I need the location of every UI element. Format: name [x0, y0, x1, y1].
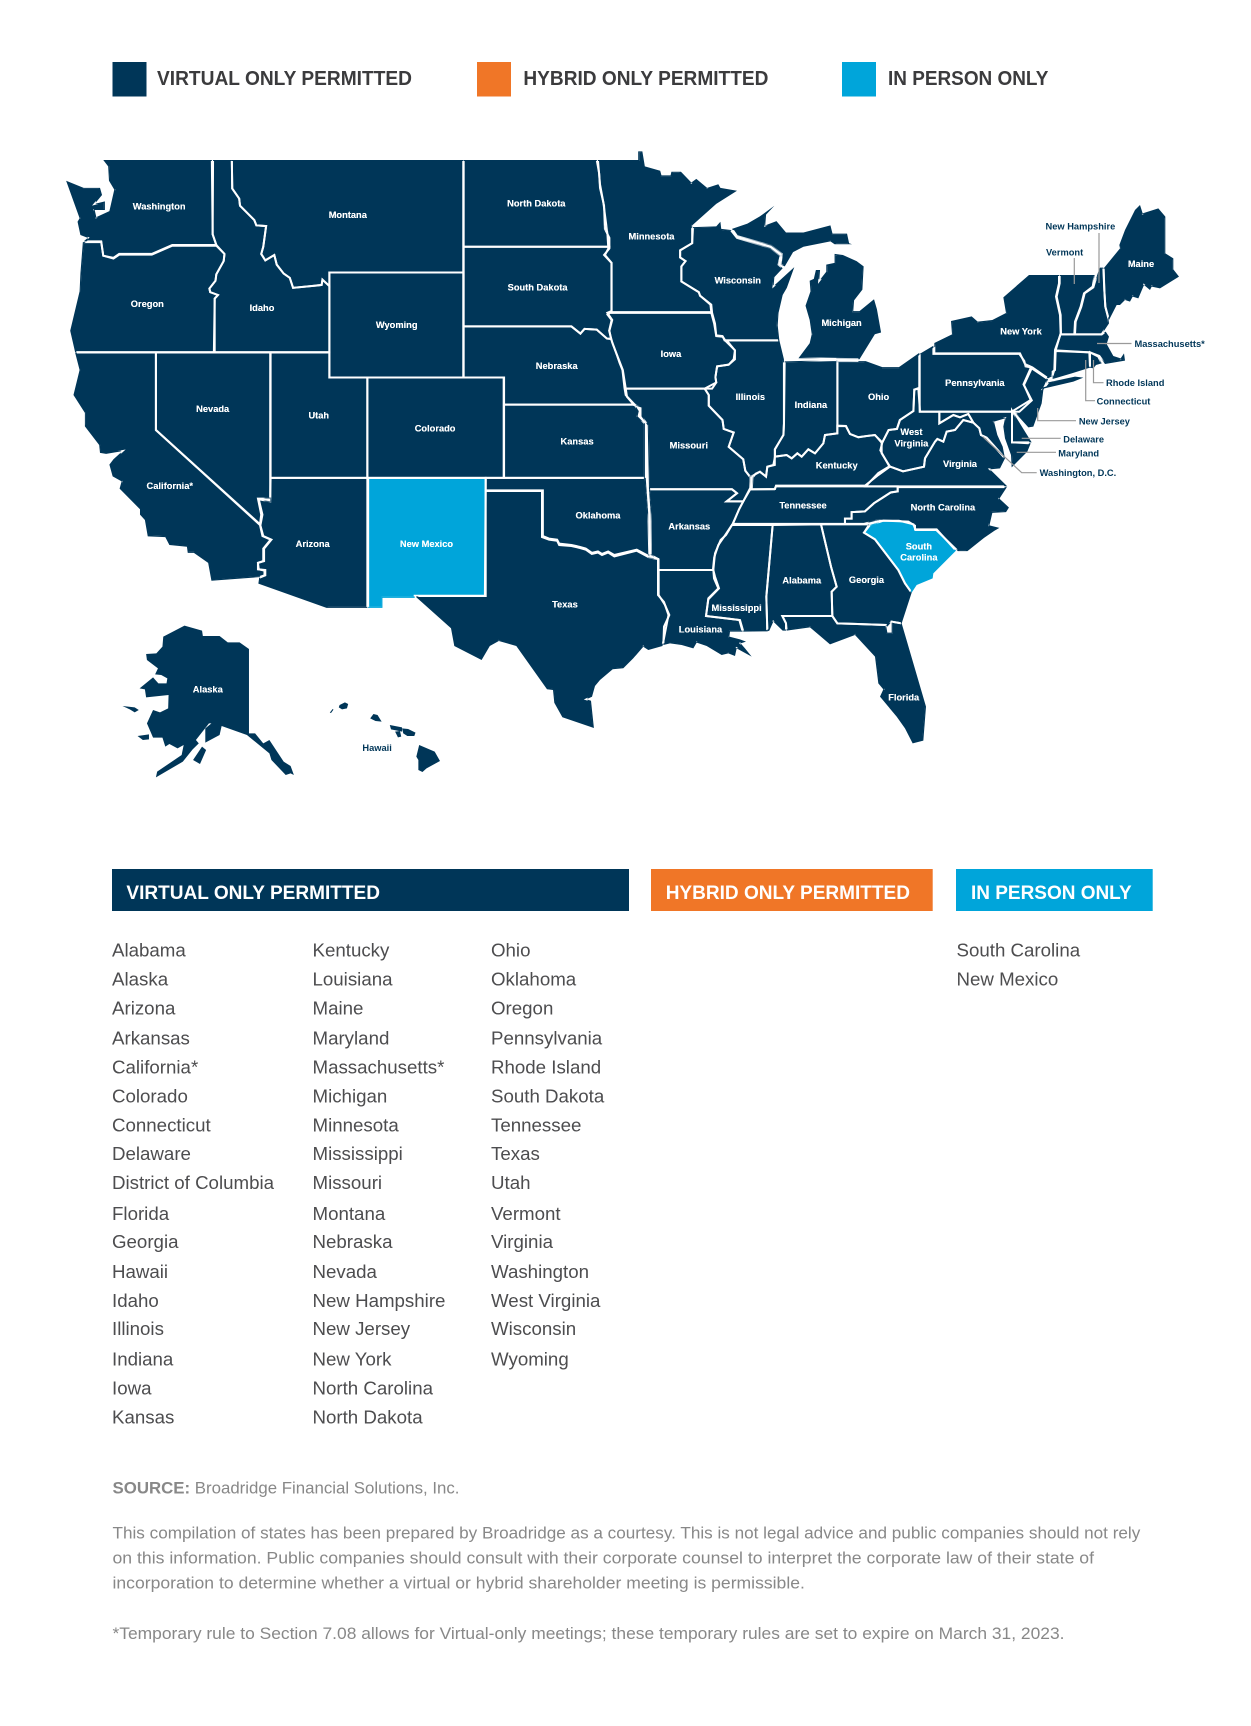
- state: Kansas: [504, 405, 645, 478]
- state: Arizona: [258, 478, 367, 608]
- state: Wyoming: Wyoming: [376, 320, 418, 330]
- disclaimer text: incorporation to determine whether a virtual or hybrid shareholder meeting is permissible.: [112, 1574, 805, 1592]
- heading: in person only: [956, 869, 1153, 911]
- list column 1: California*: [112, 1057, 198, 1078]
- list column 3: Utah: [491, 1172, 530, 1193]
- heading: virtual only permitted: VIRTUAL ONLY PERMITTED: [126, 882, 380, 904]
- list column 2: Kentucky: [312, 939, 390, 960]
- state: Virginia: Virginia: [943, 459, 978, 469]
- callout: Delaware: [1022, 435, 1104, 445]
- state: Minnesota: [598, 151, 737, 312]
- state: Iowa: [607, 313, 735, 389]
- state: Rhode Island: [1090, 352, 1102, 368]
- state: Florida: Florida: [888, 693, 920, 703]
- state: Nebraska: Nebraska: [536, 361, 578, 371]
- state: South Dakota: South Dakota: [508, 282, 568, 292]
- disclaimer text: on this information. Public companies should consult with their corporate counsel to interpret the corporate law of their state of: [112, 1549, 1094, 1567]
- state: Virginia: [866, 420, 1007, 486]
- list column 2: Montana: [312, 1203, 386, 1224]
- callout: New Jersey: New Jersey: [1079, 417, 1131, 427]
- callout: New Jersey: [1038, 408, 1131, 427]
- state: Alabama: [766, 524, 837, 631]
- list column 1: Illinois: [112, 1318, 164, 1339]
- callout: Washington, D.C.: Washington, D.C.: [1040, 468, 1116, 478]
- state: Wisconsin: [680, 222, 794, 340]
- state: Nevada: [156, 352, 270, 524]
- callout: Massachusetts: Massachusetts*: [1134, 339, 1205, 349]
- state: Massachusetts: [1056, 332, 1125, 364]
- state: Maine: Maine: [1128, 259, 1154, 269]
- state: Indiana: [775, 360, 837, 458]
- state: Oklahoma: Oklahoma: [576, 510, 621, 520]
- list column 1: Kansas: [112, 1406, 174, 1427]
- state: Arizona: Arizona: [296, 539, 331, 549]
- state: Utah: Utah: [308, 411, 329, 421]
- list column 3: Virginia: [491, 1231, 554, 1252]
- state: South Carolina: [864, 521, 956, 593]
- list: in person states: South Carolina: [956, 939, 1081, 960]
- list column 1: Alaska: [112, 968, 169, 989]
- state: New Jersey: [1013, 368, 1048, 427]
- list column 3: Washington: [491, 1261, 589, 1282]
- list column 2: Maine: [312, 997, 363, 1018]
- list column 3: Wisconsin: [491, 1318, 576, 1339]
- state: Ohio: [837, 353, 919, 442]
- state: Wisconsin: Wisconsin: [715, 275, 761, 285]
- state: New Mexico: New Mexico: [400, 539, 453, 549]
- panel: hybrid only permitted: HYBRID ONLY PERMITTED: [666, 882, 910, 904]
- state: New York: New York: [1000, 327, 1043, 337]
- list column 1: Alabama: [112, 939, 186, 960]
- callout: New Hampshire: [1046, 221, 1115, 283]
- heading: virtual only permitted: [112, 869, 629, 911]
- state: Missouri: Missouri: [670, 441, 708, 451]
- state: Illinois: Illinois: [736, 392, 765, 402]
- callouts: small northeast states with leader lines: [983, 221, 1205, 478]
- state: Pennsylvania: Pennsylvania: [945, 378, 1005, 388]
- state: Oregon: [70, 242, 224, 352]
- state: Wyoming: [329, 272, 463, 377]
- list column 1: Georgia: [112, 1231, 179, 1252]
- state: Kentucky: Kentucky: [816, 460, 858, 470]
- list column 2: Louisiana: [312, 968, 393, 989]
- state: Mississippi: [706, 525, 773, 632]
- callout: Washington, D.C.: [983, 437, 1116, 478]
- state: Illinois: [705, 340, 784, 477]
- state: West Virginia: [880, 389, 973, 471]
- state: Maryland: [939, 412, 1031, 467]
- disclaimer text: [112, 1524, 1141, 1592]
- source line: SOURCE: Broadridge Financial Solutions, Inc.: [112, 1479, 460, 1497]
- state: Connecticut: [1053, 351, 1090, 379]
- list column 2: Mississippi: [312, 1143, 403, 1164]
- state: Louisiana: [659, 570, 752, 657]
- list column 2: Minnesota: [312, 1115, 399, 1136]
- panel: in person only: [956, 869, 1153, 989]
- list column 2: Michigan: [312, 1086, 387, 1107]
- list column 2: New Jersey: [312, 1318, 411, 1339]
- list column 2: New Hampshire: [312, 1290, 445, 1311]
- list column 2: North Dakota: [312, 1406, 423, 1427]
- state: Tennessee: Tennessee: [779, 501, 827, 511]
- state: Oklahoma: [486, 478, 649, 556]
- state: Iowa: Iowa: [661, 349, 682, 359]
- list column 2: Nebraska: [312, 1231, 393, 1252]
- list column 1: Indiana: [112, 1348, 174, 1369]
- disclaimer text: This compilation of states has been prepared by Broadridge as a courtesy. This is not legal advice and public companies should not rely: [112, 1524, 1141, 1542]
- legend item: hybrid only permitted: HYBRID ONLY PERMITTED: [523, 68, 768, 90]
- list column 3: Wyoming: [491, 1348, 569, 1369]
- state: Alaska: [122, 626, 294, 777]
- state: Colorado: [367, 377, 504, 478]
- legend item: virtual only permitted: [112, 62, 412, 96]
- state: North Carolina: [845, 487, 1009, 551]
- state: Vermont: [1057, 275, 1095, 334]
- list column 3: Tennessee: [491, 1115, 581, 1136]
- states: [66, 151, 1179, 777]
- state: Pennsylvania: [920, 346, 1032, 412]
- list column 1: Connecticut: [112, 1115, 211, 1136]
- callout: Vermont: Vermont: [1046, 247, 1083, 257]
- state: Utah: [271, 352, 367, 478]
- panel: hybrid only permitted: [651, 869, 933, 911]
- list column 1: Arizona: [112, 997, 176, 1018]
- state: Texas: Texas: [552, 600, 578, 610]
- state: North Dakota: [464, 160, 609, 247]
- list column 2: Massachusetts*: [312, 1057, 444, 1078]
- list column 3: Oklahoma: [491, 968, 577, 989]
- state: Washington: [66, 160, 216, 258]
- state: West Virginia: Virginia: [894, 438, 929, 448]
- list column 2: Maryland: [312, 1028, 389, 1048]
- state: Maine: [1104, 205, 1179, 320]
- list column 3: Texas: [491, 1143, 540, 1164]
- list column 3: Vermont: [491, 1203, 561, 1224]
- legend item: in person only: [842, 62, 1049, 96]
- state: Texas: [416, 491, 668, 728]
- state: Nebraska: [464, 326, 635, 405]
- list column 1: Iowa: [112, 1377, 152, 1398]
- state: West Virginia: West: [900, 427, 922, 437]
- state: New Mexico: [368, 478, 486, 608]
- legend: [112, 62, 1049, 96]
- state: Mississippi: Mississippi: [712, 603, 762, 613]
- state: Louisiana: Louisiana: [679, 625, 723, 635]
- list column 1: Hawaii: [112, 1261, 168, 1282]
- list column 3: Ohio: [491, 939, 530, 960]
- state: Alabama: Alabama: [782, 576, 822, 586]
- state: North Dakota: North Dakota: [507, 198, 566, 208]
- state: California: California*: [147, 481, 193, 491]
- state: Colorado: Colorado: [415, 424, 456, 434]
- list column 3: Pennsylvania: [491, 1028, 603, 1048]
- state: Hawaii: [330, 702, 440, 772]
- callout: Massachusetts: [1097, 339, 1205, 349]
- list: in person states: New Mexico: [956, 968, 1058, 989]
- state: Indiana: Indiana: [795, 400, 828, 410]
- state: North Carolina: North Carolina: [911, 502, 976, 512]
- callout: Delaware: Delaware: [1063, 435, 1104, 445]
- state: Michigan: Michigan: [821, 318, 862, 328]
- callout: Connecticut: [1086, 360, 1150, 407]
- callout: New Hampshire: New Hampshire: [1046, 221, 1115, 231]
- list column 1: Idaho: [112, 1290, 159, 1311]
- list column 1: District of Columbia: [112, 1172, 275, 1193]
- state: Kentucky: [752, 426, 890, 489]
- state: Idaho: [209, 160, 329, 352]
- state: Arkansas: Arkansas: [668, 521, 710, 531]
- state: Washington: Washington: [133, 201, 186, 211]
- state: Florida: [782, 616, 926, 743]
- heading: in person only: IN PERSON ONLY: [971, 882, 1132, 904]
- list column 3: West Virginia: [491, 1290, 601, 1311]
- list column 3: South Dakota: [491, 1086, 605, 1107]
- callout: Maryland: Maryland: [1058, 448, 1099, 458]
- state: Georgia: Georgia: [849, 575, 885, 585]
- state: Missouri: [626, 389, 750, 501]
- list column 3: Rhode Island: [491, 1057, 601, 1078]
- state: South Carolina: South: [906, 541, 932, 551]
- list column 1: Florida: [112, 1203, 170, 1224]
- list column 1: Colorado: [112, 1086, 188, 1107]
- legend item: hybrid only permitted: [477, 62, 768, 96]
- state: New York: [934, 275, 1083, 389]
- state: Minnesota: Minnesota: [629, 232, 675, 242]
- state: Michigan: [732, 206, 881, 359]
- list column 2: North Carolina: [312, 1377, 434, 1398]
- state: Kansas: Kansas: [561, 436, 594, 446]
- callout: Rhode Island: Rhode Island: [1106, 378, 1165, 388]
- state: Georgia: [821, 524, 912, 627]
- state: South Dakota: [464, 247, 612, 339]
- list column 3: Oregon: [491, 997, 553, 1018]
- state: Hawaii: Hawaii: [362, 743, 392, 753]
- footnote: *Temporary rule to Section 7.08 allows for Virtual-only meetings; these temporary rules are set to expire on March 31, 2023.: [112, 1625, 1064, 1643]
- legend item: virtual only permitted: VIRTUAL ONLY PERMITTED: [157, 68, 412, 90]
- state: Montana: [232, 160, 463, 288]
- state: South Carolina: Carolina: [900, 552, 938, 562]
- state: Idaho: Idaho: [250, 303, 275, 313]
- list column 2: Missouri: [312, 1172, 382, 1193]
- callout: Maryland: [1017, 448, 1099, 458]
- state: California: [73, 352, 271, 581]
- state: New Hampshire: [1075, 268, 1109, 334]
- callout: Connecticut: Connecticut: [1097, 397, 1150, 407]
- state: Montana: Montana: [329, 210, 368, 220]
- list column 1: Arkansas: [112, 1028, 190, 1048]
- list column 1: Delaware: [112, 1143, 191, 1164]
- list column 2: Nevada: [312, 1261, 378, 1282]
- callout: Vermont: [1046, 247, 1083, 284]
- state: Nevada: Nevada: [196, 404, 230, 414]
- legend item: in person only: IN PERSON ONLY: [888, 68, 1049, 90]
- state: Ohio: Ohio: [868, 392, 889, 402]
- panel: virtual only permitted list: [112, 869, 629, 1427]
- state: Delaware: [1012, 411, 1032, 442]
- state: Tennessee: [733, 486, 898, 524]
- state: Alaska: Alaska: [193, 685, 224, 695]
- white state borders: [66, 151, 1179, 777]
- callout: Rhode Island: [1094, 360, 1165, 388]
- state: Oregon: Oregon: [131, 299, 164, 309]
- list column 2: New York: [312, 1348, 392, 1369]
- map of the United States: [66, 151, 1205, 777]
- state: Arkansas: [649, 489, 743, 570]
